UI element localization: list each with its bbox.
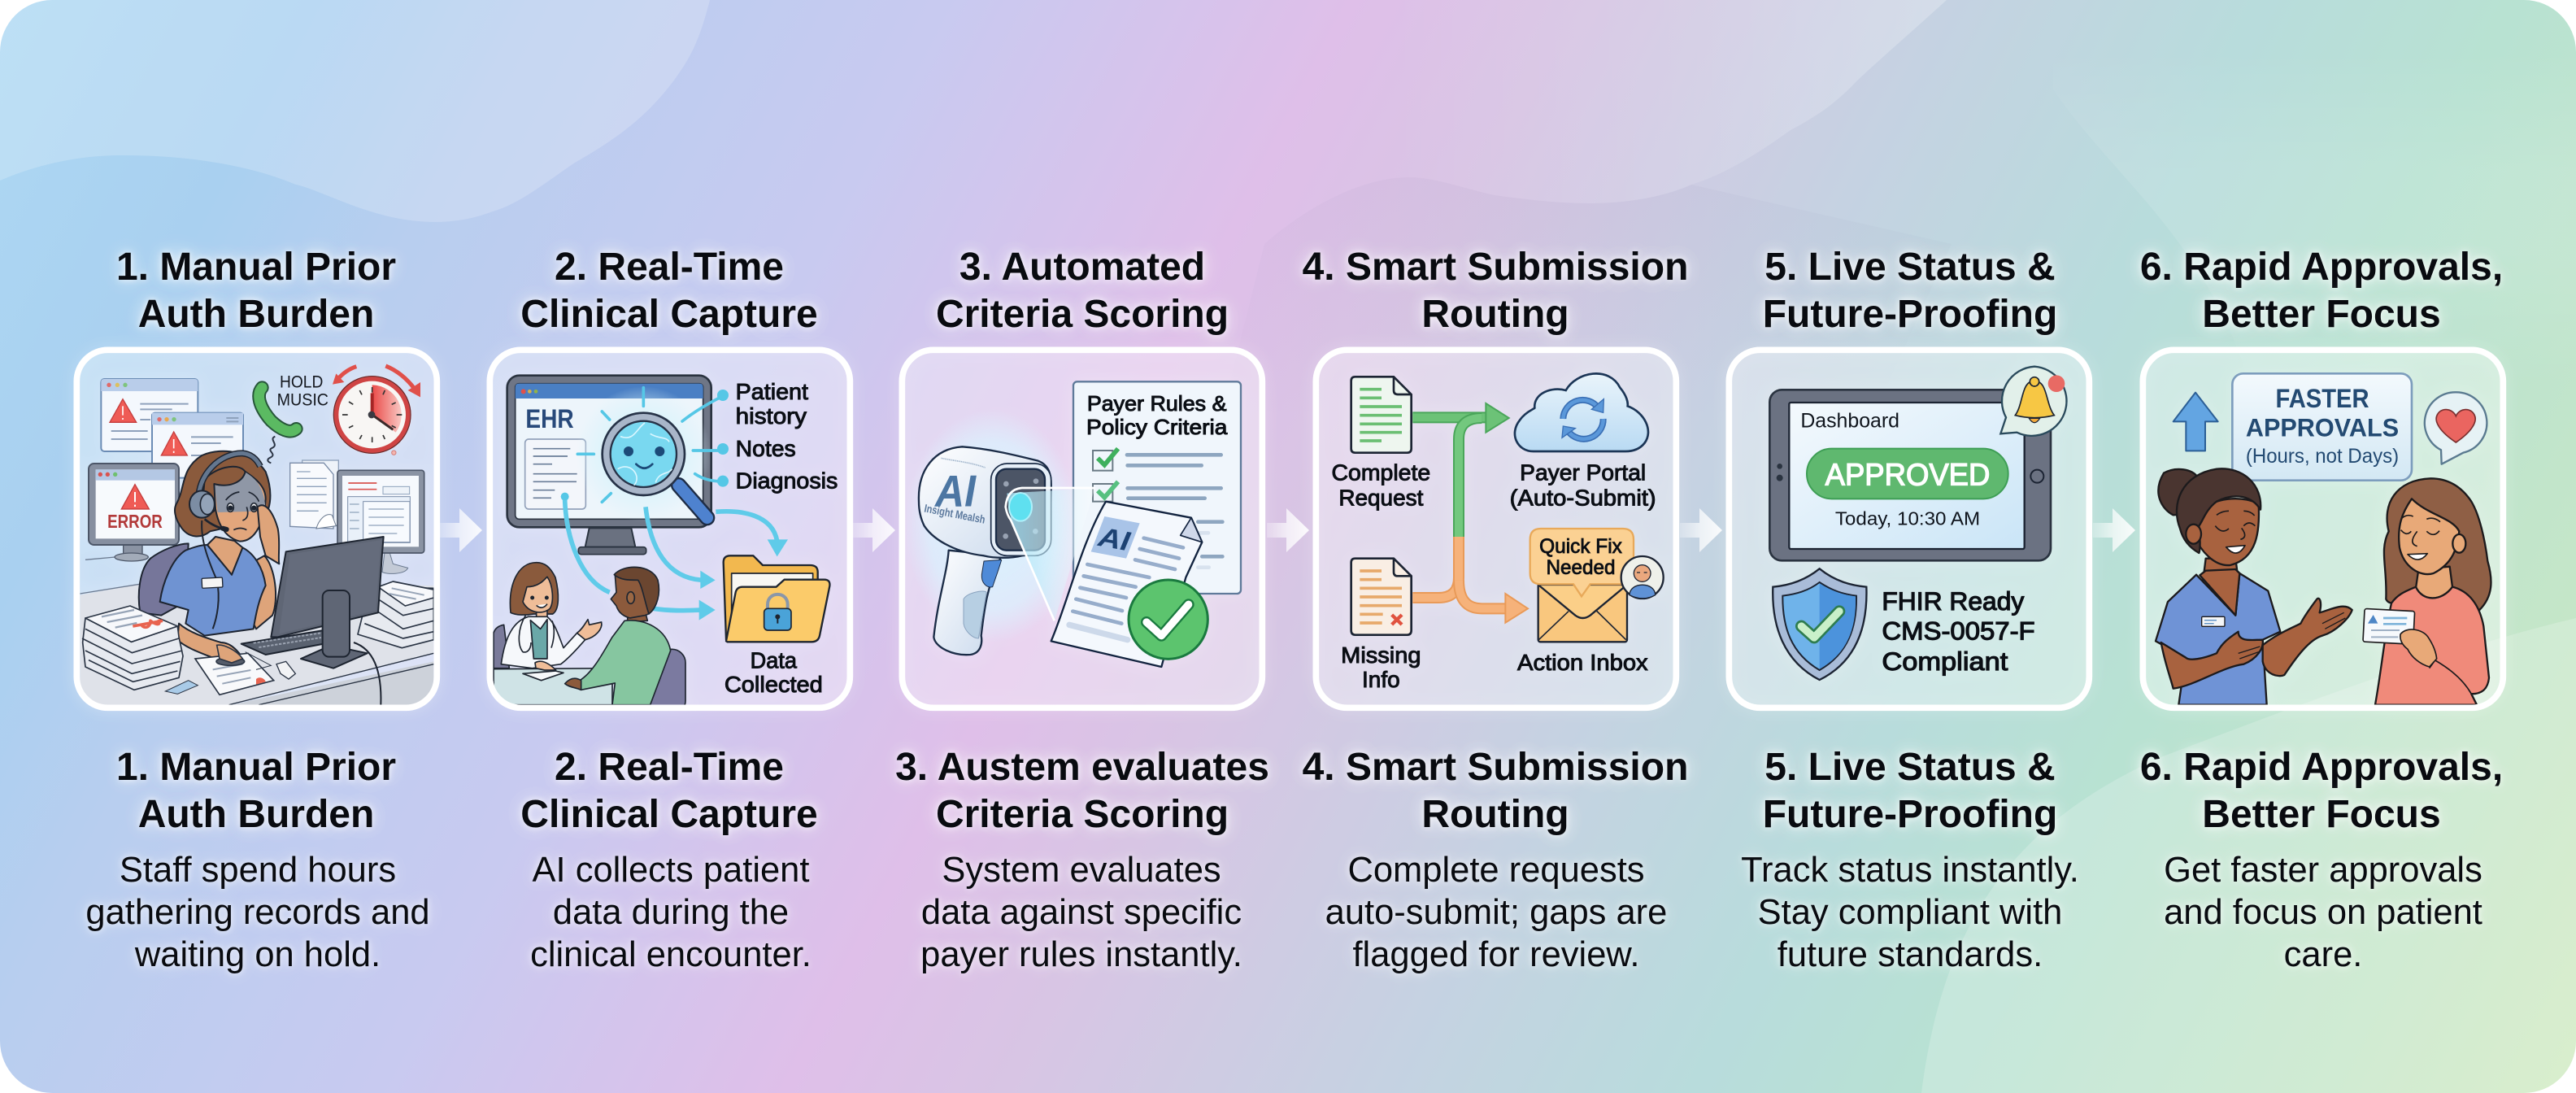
body: step 4: auto-submit; gaps are — [1325, 893, 1667, 932]
icon: complete document — [1351, 377, 1412, 453]
label: action inbox: Action Inbox — [1517, 650, 1648, 675]
monitor: error screen: ERROR — [107, 511, 163, 532]
heading: step 4 lower: Routing — [1421, 792, 1569, 836]
window: error alert B — [152, 413, 243, 478]
flow arrows between panels — [0, 488, 2576, 577]
body: step 6: and focus on patient — [2164, 893, 2482, 932]
label: FHIR compliance: FHIR Ready — [1882, 586, 2025, 616]
icon: magnifying glass with AI face — [603, 413, 707, 518]
heading: step 3 top: 3. Automated — [959, 246, 1205, 289]
icon: heart bubble — [2425, 392, 2487, 464]
heading: step 3 lower — [855, 744, 1310, 838]
icon: up arrow — [2174, 393, 2218, 451]
icon: notification bell — [2000, 367, 2066, 436]
heading: step 1 lower: 1. Manual Prior — [116, 746, 396, 789]
label: missing info — [1341, 642, 1421, 692]
heading: step 4 top: Routing — [1421, 293, 1569, 335]
icon: green check badge — [1129, 580, 1208, 659]
arrow: step 3 to 4 — [1267, 508, 1309, 552]
callout: faster approvals: FASTER — [2275, 384, 2369, 413]
icon: compliance shield — [1773, 568, 1866, 680]
figure: stressed staff member — [139, 451, 279, 663]
document: payer rules and policy criteria — [1073, 381, 1241, 594]
label: data collected: Data — [751, 648, 797, 673]
label: hold music: MUSIC — [277, 390, 329, 410]
icon: AI scanner: Insight Mealsh — [923, 502, 986, 526]
panel: real-time clinical capture — [486, 346, 854, 711]
body: step 4: Complete requests — [1347, 851, 1645, 890]
arrow: step 5 to 6 — [2093, 508, 2135, 552]
name badge — [202, 577, 223, 588]
labels: patient data: Notes — [736, 436, 796, 461]
body: step 5: Stay compliant with — [1758, 893, 2062, 932]
arrow: step 2 to 3 — [853, 508, 895, 552]
heading: step 6 lower: 6. Rapid Approvals, — [2140, 746, 2503, 789]
heading: step 3 lower: Criteria Scoring — [936, 792, 1229, 836]
body: step 3: System evaluates — [942, 851, 1221, 890]
curved data arrows — [565, 500, 788, 621]
heading: step 1 top — [114, 246, 398, 335]
heading: step 5 lower: 5. Live Status & — [1764, 746, 2056, 789]
label: payer portal — [1510, 460, 1656, 511]
body: step 1: gathering records and — [85, 893, 430, 932]
callout: quick fix needed: Quick Fix — [1539, 536, 1622, 558]
body: step 5: Track status instantly. — [1741, 851, 2079, 890]
panel: smart submission routing — [1312, 346, 1680, 711]
labels: patient data: Diagnosis — [736, 468, 838, 494]
heading: step 5 top: 5. Live Status & — [1764, 246, 2056, 289]
heading: step 3 top: Criteria Scoring — [936, 293, 1229, 335]
label: FHIR compliance: Compliant — [1882, 647, 2008, 676]
monitor: EHR: EHR — [525, 404, 574, 433]
panel: manual prior auth burden — [71, 346, 441, 713]
window: error alert A — [101, 379, 198, 451]
stack of papers: left — [82, 606, 183, 690]
icon: envelope — [1538, 584, 1627, 642]
document: payer rules and policy criteria: Payer Rules & — [1087, 391, 1226, 416]
callout: quick fix needed: Needed — [1547, 557, 1615, 579]
heading: step 6 lower: Better Focus — [2202, 792, 2441, 836]
stack of papers: right — [358, 581, 433, 648]
connector rays and dots — [561, 388, 729, 502]
scanning beam — [1006, 488, 1095, 621]
headset — [189, 453, 260, 629]
heading: step 2 top: 2. Real-Time — [555, 246, 784, 289]
document: payer rules and policy criteria: Policy Criteria — [1086, 415, 1228, 439]
heading: step 2 lower: Clinical Capture — [520, 792, 818, 836]
body: step 2: AI collects patient — [533, 851, 809, 890]
label: missing info: Info — [1362, 667, 1400, 692]
label: FHIR compliance: CMS-0057-F — [1882, 616, 2035, 646]
label: missing info: Missing — [1341, 642, 1421, 668]
label: complete request: Request — [1338, 486, 1424, 511]
paper under hand — [165, 645, 295, 695]
body: step 2: data during the — [553, 893, 789, 932]
labels: patient data — [736, 379, 838, 494]
document: AI scored request: AI — [1095, 522, 1133, 557]
labels: patient data: Patient — [736, 379, 808, 404]
label: data collected: Collected — [724, 672, 823, 697]
heading: step 4 top — [1298, 246, 1691, 340]
icon: tablet dashboard: Today, 10:30 AM — [1835, 508, 1980, 529]
figure: nurse — [2156, 468, 2352, 705]
heading: step 1 top: 1. Manual Prior — [116, 246, 396, 289]
routing arrows — [1412, 403, 1528, 623]
heading: step 5 lower: Future-Proofing — [1763, 792, 2057, 836]
glow — [576, 386, 711, 522]
heading: step 5 lower — [1682, 744, 2138, 838]
label: complete request — [1332, 460, 1430, 511]
icon: tablet dashboard: APPROVED — [1825, 459, 1990, 493]
body: step 6: Get faster approvals — [2164, 851, 2482, 890]
heading: step 2 top — [516, 246, 821, 338]
label: hold music: HOLD — [280, 372, 323, 392]
desk monitor back — [242, 537, 384, 705]
body: step 5 — [1690, 849, 2130, 976]
body: step 4: flagged for review. — [1352, 935, 1640, 974]
icon: tablet dashboard — [1769, 390, 2051, 560]
heading: step 3 lower: 3. Austem evaluates — [895, 746, 1269, 789]
heading: step 4 lower — [1268, 744, 1723, 838]
panel: automated criteria scoring — [899, 346, 1265, 711]
icon: phone handset — [259, 388, 296, 463]
heading: step 5 top: Future-Proofing — [1763, 293, 2057, 335]
body: step 5: future standards. — [1778, 935, 2043, 974]
body: step 2 — [451, 849, 890, 976]
figure: patient — [2363, 478, 2491, 705]
body: step 6 — [2104, 849, 2543, 976]
icon: clock with red arrows — [333, 366, 420, 455]
heading: step 6 top: Better Focus — [2202, 293, 2441, 335]
icon: AI scanner — [919, 446, 1051, 655]
body: step 4 — [1277, 849, 1716, 976]
label: complete request: Complete — [1332, 460, 1430, 486]
icon: AI scanner: AI — [933, 466, 977, 516]
panel: rapid approvals, better focus — [2135, 342, 2511, 716]
icon: cloud with sync — [1515, 373, 1648, 451]
body: step 1 — [38, 849, 477, 976]
heading: step 3 top — [933, 246, 1233, 340]
body: step 2: clinical encounter. — [530, 935, 812, 974]
figure: doctor — [494, 563, 612, 705]
panel: live status and future-proofing — [1725, 346, 2093, 711]
document: AI scored request — [1051, 502, 1202, 667]
label: payer portal: Payer Portal — [1520, 460, 1646, 486]
heading: step 2 lower — [442, 744, 897, 838]
heading: step 4 top: 4. Smart Submission — [1303, 246, 1688, 289]
monitor: error screen — [89, 464, 179, 561]
heading: step 2 lower: 2. Real-Time — [555, 746, 784, 789]
label: payer portal: (Auto-Submit) — [1510, 486, 1656, 511]
body: step 1: Staff spend hours — [120, 851, 396, 890]
label: data collected — [724, 648, 823, 697]
heading: step 1 top: Auth Burden — [138, 293, 374, 335]
icon: tablet dashboard: Dashboard — [1800, 411, 1899, 433]
heading: step 6 lower — [2094, 744, 2549, 838]
icon: folder with lock — [724, 555, 829, 642]
callout: faster approvals — [2232, 373, 2412, 481]
heading: step 6 top — [2134, 246, 2504, 335]
body: step 1: waiting on hold. — [135, 935, 381, 974]
label: FHIR compliance — [1882, 586, 2035, 676]
callout: faster approvals: (Hours, not Days) — [2246, 446, 2399, 468]
heading: step 4 lower: 4. Smart Submission — [1303, 746, 1688, 789]
body: step 3 — [862, 849, 1301, 976]
scanner glow — [905, 409, 1079, 642]
face details — [226, 492, 259, 530]
monitor: EHR — [507, 376, 711, 555]
heading: step 1 lower: Auth Burden — [138, 792, 374, 836]
figure: patient — [565, 567, 685, 714]
label: hold music — [278, 376, 329, 405]
body: step 3: data against specific — [921, 893, 1242, 932]
icon: missing info document — [1351, 559, 1412, 635]
callout: quick fix needed — [1530, 529, 1634, 596]
body: step 3: payer rules instantly. — [920, 935, 1242, 974]
icon: reviewer avatar — [1621, 556, 1664, 599]
arrow: step 4 to 5 — [1680, 508, 1722, 552]
document and right monitor — [290, 460, 424, 573]
heading: step 1 lower — [28, 744, 484, 838]
heading: step 2 top: Clinical Capture — [520, 293, 818, 335]
heading: step 5 top — [1760, 246, 2062, 340]
heading: step 6 top: 6. Rapid Approvals, — [2140, 246, 2503, 289]
body: step 6: care. — [2284, 935, 2362, 974]
callout: faster approvals: APPROVALS — [2246, 414, 2399, 442]
arrow: step 1 to 2 — [440, 508, 482, 552]
labels: patient data: history — [736, 403, 807, 429]
